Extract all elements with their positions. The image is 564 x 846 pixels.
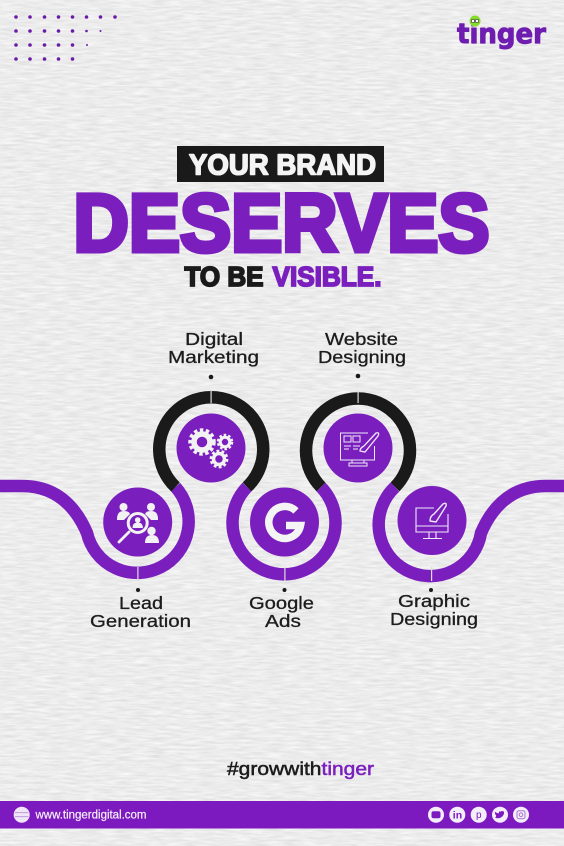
labels [90, 329, 478, 631]
icon: pinterest: p [476, 810, 482, 821]
label: lead generation: Lead [119, 593, 163, 613]
icon: google G [250, 488, 319, 556]
logo mascot head [470, 16, 480, 26]
label: website designing: Designing [318, 347, 406, 367]
icon: graphic monitor [398, 486, 466, 555]
label: digital marketing [168, 329, 259, 367]
black arc website [306, 398, 410, 487]
icon: twitter [492, 807, 508, 823]
label: graphic designing [390, 591, 478, 629]
icon: gears [176, 414, 246, 482]
label: google ads: Google [249, 593, 314, 613]
purple road left [0, 486, 189, 573]
label: graphic designing: Graphic [398, 591, 470, 611]
heading: deserves: DESERVES [74, 178, 490, 269]
footer bar [0, 801, 564, 828]
heading: to be visible [184, 261, 382, 292]
label: graphic designing: Designing [390, 609, 478, 629]
label: website designing [318, 329, 406, 367]
label: google ads: Ads [265, 611, 301, 631]
black arc digital marketing [159, 397, 263, 487]
road ticks and dots [136, 374, 433, 592]
purple road right [379, 486, 564, 576]
heading: your brand box: YOUR BRAND [189, 150, 376, 182]
logo: tinger [457, 16, 546, 50]
heading: to be visible: VISIBLE. [272, 261, 382, 292]
label: website designing: Website [325, 329, 398, 349]
icon: lead generation [103, 488, 172, 556]
purple arc google [232, 487, 335, 574]
icon: website monitor [324, 414, 392, 482]
label: digital marketing: Digital [185, 329, 243, 349]
heading [74, 146, 490, 292]
label: lead generation [90, 593, 191, 631]
icon: instagram [513, 807, 529, 823]
label: google ads [249, 593, 314, 631]
hashtag: #growwith tinger [227, 758, 374, 779]
label: digital marketing: Marketing [168, 347, 259, 367]
winding road timeline [0, 397, 564, 576]
icon: globe [14, 807, 30, 823]
heading: to be visible: TO BE [184, 261, 264, 292]
icon: youtube [428, 807, 444, 823]
icon: linkedin: in [453, 810, 462, 822]
logo wordmark: tinger [457, 17, 546, 50]
dot pattern [14, 15, 117, 61]
social icons [428, 807, 529, 823]
label: lead generation: Generation [90, 611, 191, 631]
website url: www.tingerdigital.com [35, 810, 146, 822]
